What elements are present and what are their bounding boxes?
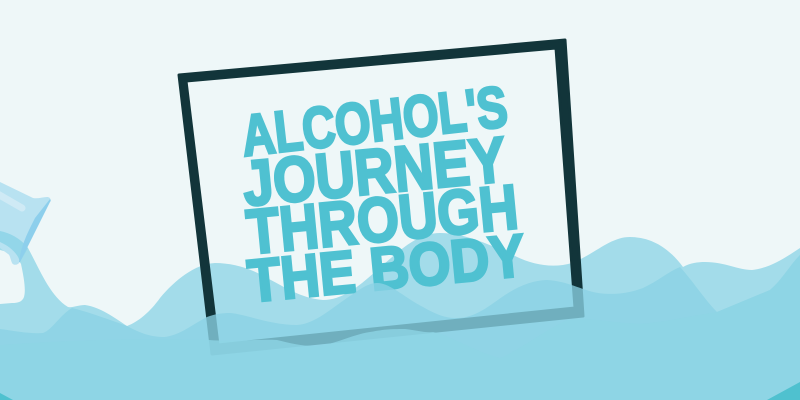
glass highlight — [0, 193, 22, 208]
glass body — [0, 182, 50, 265]
front water wave — [0, 255, 800, 400]
tilted dark frame — [179, 40, 583, 354]
title line: JOURNEY: JOURNEY — [239, 123, 509, 220]
glass rim — [19, 199, 51, 262]
title line: THE BODY: THE BODY — [245, 222, 528, 315]
bottom left teal corner — [0, 393, 13, 400]
icon: tipped glass — [0, 182, 51, 265]
back water wave with pouring stream — [0, 233, 800, 400]
third water layer covering lower frame bar — [0, 255, 800, 400]
bottom right teal corner — [767, 382, 800, 400]
title line: ALCOHOL'S: ALCOHOL'S — [238, 74, 511, 169]
liquid in glass — [0, 231, 28, 262]
title — [238, 74, 528, 315]
title line: THROUGH: THROUGH — [244, 172, 521, 268]
